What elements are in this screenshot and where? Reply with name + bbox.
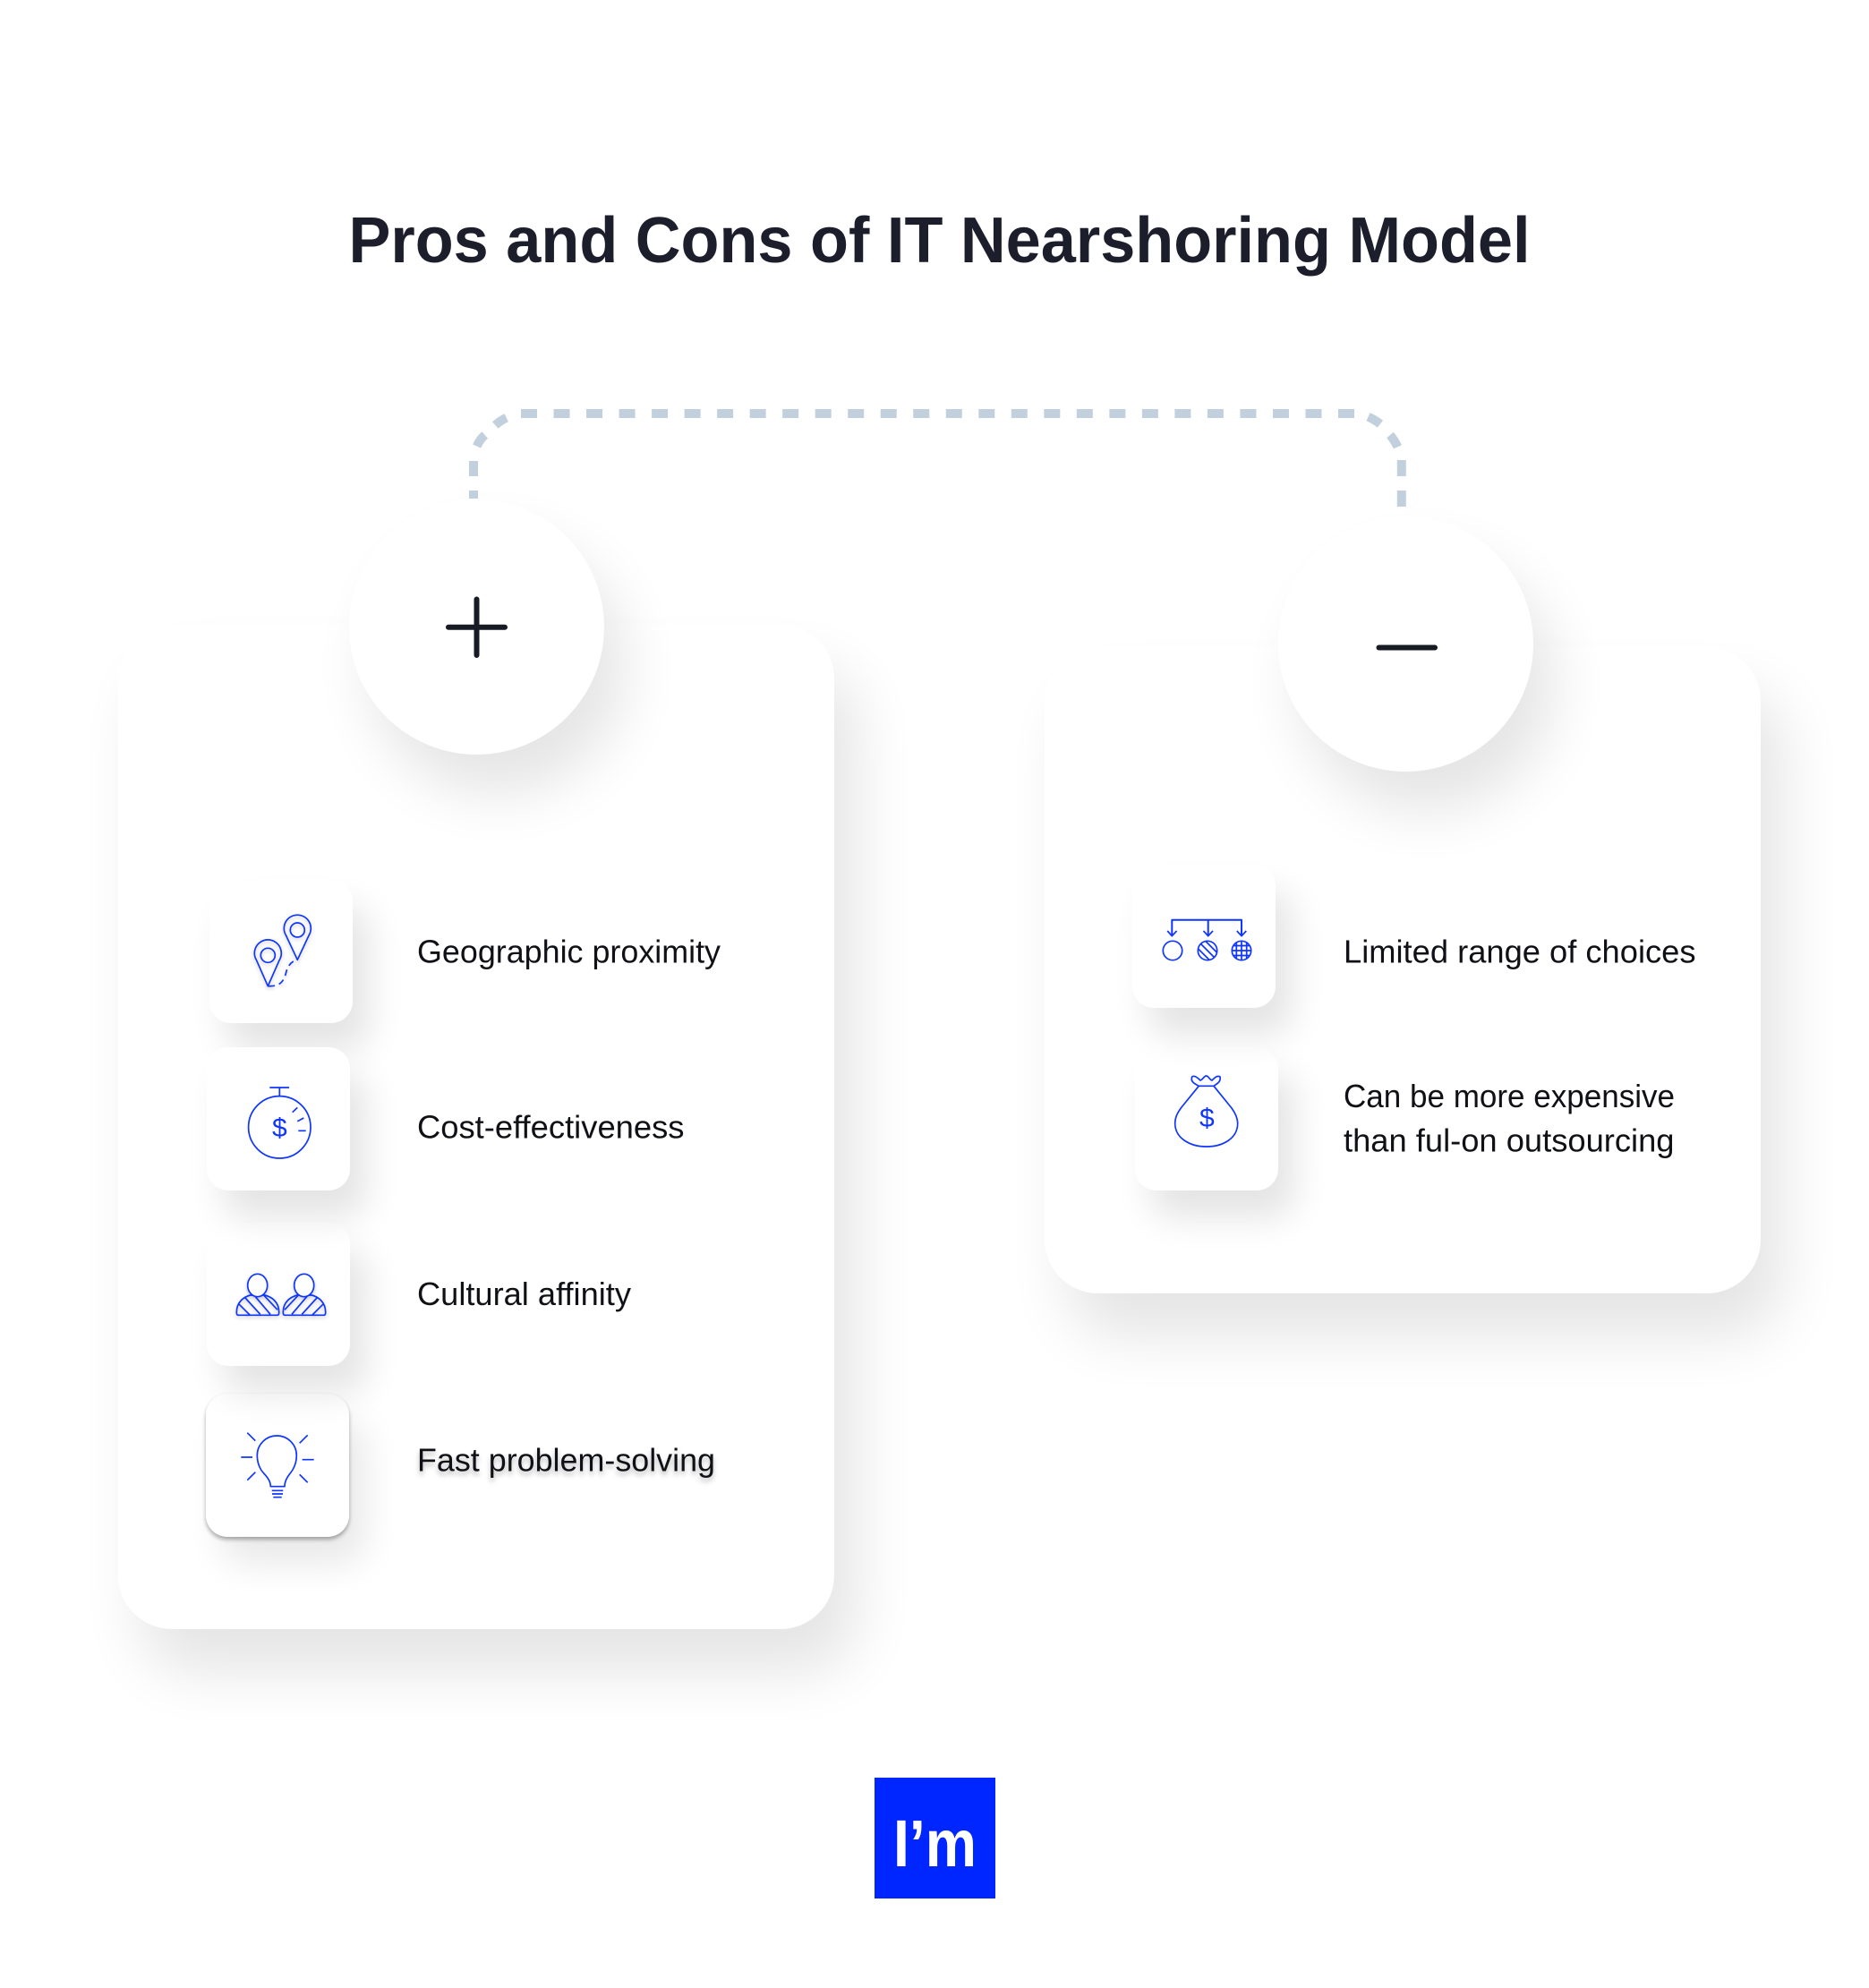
card: fast problem-solving icon [206, 1394, 349, 1537]
logo [875, 1778, 995, 1898]
label: fast problem-solving: Fast problem-solving [417, 1441, 714, 1478]
label: cost-effectiveness: Cost-effectiveness [417, 1109, 684, 1146]
label: cultural affinity: Cultural affinity [417, 1276, 630, 1312]
minus badge [1278, 516, 1532, 772]
label: limited range of choices: Limited range of choices [1343, 933, 1695, 970]
panel: pros [118, 625, 834, 1629]
title: Pros and Cons of IT Nearshoring Model [349, 205, 1531, 277]
card: cultural affinity icon [207, 1223, 350, 1366]
card: limited choices icon [1132, 865, 1276, 1008]
card: cost-effectiveness icon: $ [272, 1113, 287, 1143]
card: expense icon: $ [1199, 1104, 1215, 1133]
plus badge [349, 499, 604, 754]
label: geographic proximity: Geographic proximity [417, 933, 720, 970]
label: can be more expensive: than ful-on outsourcing [1343, 1122, 1674, 1158]
label: can be more expensive [1343, 1078, 1674, 1158]
panel: cons [1045, 647, 1761, 1293]
card: expense icon [1135, 1047, 1278, 1190]
dashed connector between plus and minus [469, 409, 1406, 507]
card: cost-effectiveness icon [207, 1047, 350, 1190]
label: can be more expensive: Can be more expensive [1343, 1078, 1674, 1114]
logo: I’m [893, 1806, 977, 1881]
card: geographic proximity icon [209, 880, 353, 1023]
